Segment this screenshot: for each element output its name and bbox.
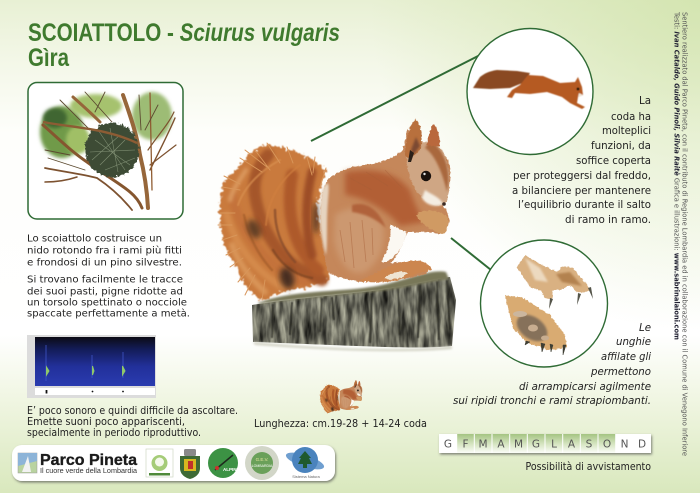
credits: vertical text: Testi: Ivan Cataldo, Guido Pinoli, Silvia Raitè Grafica e illustrazioni: www.sabrinalaioni.com [672,11,680,340]
upper paw [517,255,593,309]
text block: sound description: specialmente in periodo riproduttivo. [27,427,201,439]
chart: sighting months: A [568,438,576,450]
illustration: squirrel on stump [218,119,456,351]
panel: tail circle [467,28,593,154]
chart: sighting months: G [444,438,452,450]
logo: alpini: ALPINI [223,467,238,472]
lower paw [505,295,567,355]
chart: sighting months: M [478,438,488,450]
chart: sighting months: D [638,438,646,450]
text block: tail description [512,95,651,226]
logo: guardie ecologiche: LOMBARDIA [252,464,273,468]
chart: sighting months: A [497,438,505,450]
branches [43,92,176,210]
text block: nest description: dei suoi pasti, pigne ridotte ad [27,286,183,298]
text block: sound description: Emette suoni poco appariscenti, [27,416,185,428]
logo strip [12,445,335,481]
credits: vertical text: Sentiero realizzato dal Parco Pineta, con il contributo di Regione Lombardia ed in collaborazione con il Comune di Venegono Inferiore [680,12,688,456]
text block: claws description: di arrampicarsi agilmente [519,381,651,393]
panel: paws circle [480,240,608,367]
tree stump [252,271,456,351]
text block: nest description: Lo scoiattolo costruisce un [27,234,162,244]
logo: Parco Pineta: Il cuore verde della Lombardia [40,468,137,475]
foliage [40,92,172,158]
text block: claws description: sui ripidi tronchi e rami strapiombanti. [453,395,651,407]
nest [85,123,139,177]
logo: guardie ecologiche: G.E.V. [256,457,268,462]
text block: nest description [27,234,190,320]
text block: tail description: soffice coperta [576,155,651,167]
title: Gìra [28,44,70,72]
chart: sighting months: M [514,438,523,450]
text block: tail description: coda ha [611,111,651,123]
logo: alpini [208,448,238,478]
text block: tail description: molteplici [602,125,651,137]
arrow: leader line to paws circle [451,238,491,270]
arrow: leader line to tail circle [311,54,482,141]
text block: claws description: Le [639,322,651,334]
text block: tail description: di ramo in ramo. [565,214,651,226]
leaping squirrel [473,70,585,109]
chart: sighting months: G [532,438,540,450]
chart: sound spectrogram [27,335,156,398]
text block: tail description: a bilanciere per mantenere [512,185,651,197]
panel: nest illustration [28,82,183,219]
chart: sighting months: S [586,438,593,450]
text block: nest description: un torsolo spettinato o nocciole [27,298,187,308]
text block: claws description [453,322,651,407]
text block: sound description [27,405,238,439]
chart: sighting months: L [551,438,557,450]
text block: claws description: unghie [616,336,651,348]
text block: sound description: E’ poco sonoro e quindi difficile da ascoltare. [27,405,238,417]
title: SCOIATTOLO - Sciurus vulgaris [28,19,340,47]
text block: nest description: nido rotondo fra i rami più fitti [27,244,182,256]
text block: tail description: La [639,95,651,107]
text: sighting caption: Possibilità di avvistamento [526,461,651,473]
logo: Parco Pineta: Parco Pineta [40,452,137,469]
logo: planet natura: Sistema Natura [292,474,321,479]
logo: guardie ecologiche [245,446,279,480]
chart: sighting months [439,434,651,453]
text block: claws description: permettono [590,366,651,378]
text block: nest description: e frondosi di un pino silvestre. [27,258,182,268]
text block: tail description: funzioni, da [591,140,651,152]
logo: planet natura [284,447,326,479]
text block: nest description: spaccate perfettamente a metà. [27,308,190,320]
text block: nest description: Si trovano facilmente le tracce [27,274,183,286]
chart: sighting months: F [462,438,469,450]
logo: sistema parchi [146,449,173,477]
text block: tail description: per proteggersi dal freddo, [513,170,651,182]
chart: sighting months: N [621,438,628,450]
icon: small squirrel size reference [320,380,362,413]
text block: tail description: l’equilibrio durante il salto [518,199,651,211]
logo: municipal crest [180,449,200,479]
text block: claws description: affilate gli [601,351,651,363]
logo: Parco Pineta [18,452,137,475]
title [28,19,340,72]
credits: vertical text [672,11,688,456]
chart: sighting months: O [603,438,611,450]
text: length: Lunghezza: cm.19-28 + 14-24 coda [254,418,427,430]
